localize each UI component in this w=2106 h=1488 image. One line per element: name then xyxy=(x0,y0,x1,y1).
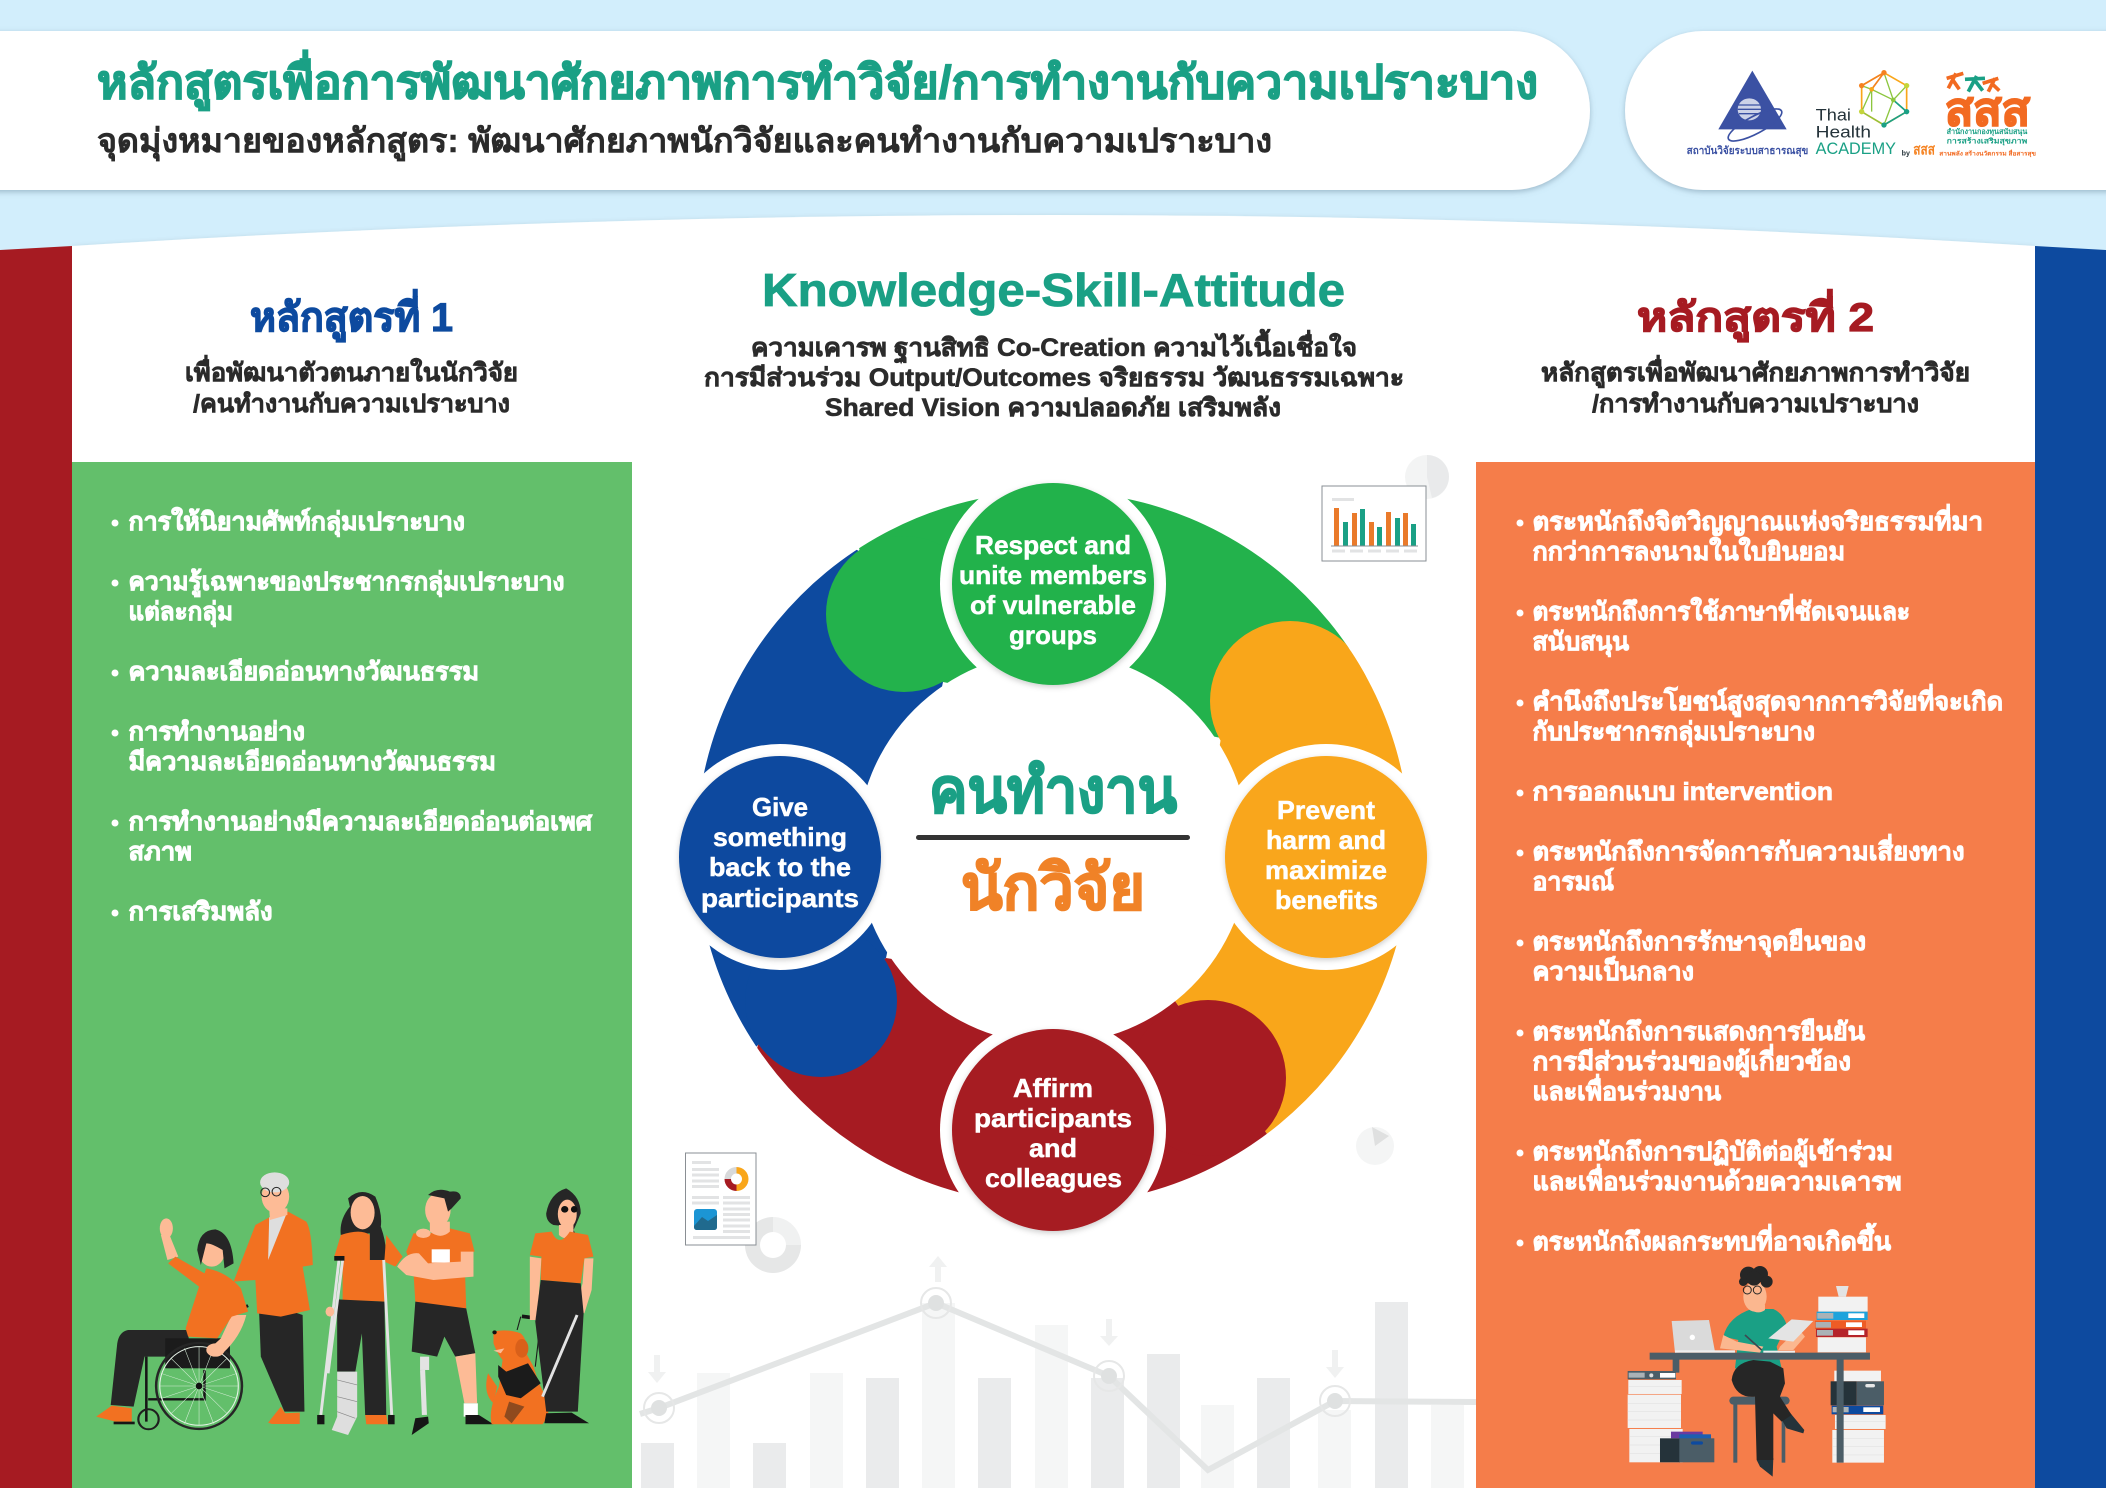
logo: ThaiHealth: สสส xyxy=(1913,143,1935,159)
course 1 heading block xyxy=(185,289,518,418)
guide dog xyxy=(486,1314,548,1424)
logo: ThaiHealth: การสร้างเสริมสุขภาพ xyxy=(1947,136,2027,145)
course 2 bullet list xyxy=(1516,504,2003,1256)
man with prosthetic leg xyxy=(397,1190,493,1435)
logos group xyxy=(1687,70,2036,159)
node: respect and unite: unite members xyxy=(959,560,1147,590)
node: affirm participants: participants xyxy=(974,1103,1132,1133)
keywords text: การมีส่วนร่วม Output/Outcomes จริยธรรม วัฒนธรรมเฉพาะ xyxy=(704,364,1404,392)
logo: ThaiHealth: by xyxy=(1902,148,1911,157)
woman with white cane xyxy=(530,1188,593,1423)
course 1 bullet list: การให้นิยามศัพท์กลุ่มเปราะบาง xyxy=(128,506,465,538)
course 1 description: /คนทำงานกับความเปราะบาง xyxy=(193,390,510,418)
node: give something back: back to the xyxy=(709,852,851,882)
course 2 bullet list: สนับสนุน xyxy=(1532,628,1629,658)
illustration: researcher at desk xyxy=(1628,1266,1886,1477)
person in wheelchair xyxy=(96,1218,248,1429)
stack on desk with cup xyxy=(1815,1286,1868,1352)
node: respect and unite xyxy=(940,471,1166,697)
course 2 bullet list: ตระหนักถึงการรักษาจุดยืนของ xyxy=(1532,928,1866,958)
heading: course 2: หลักสูตรที่ 2 xyxy=(1637,289,1874,342)
center text: workers: คนทำงาน xyxy=(929,757,1177,826)
course 1 bullet list xyxy=(112,506,593,926)
faint pie decoration top xyxy=(1405,455,1449,499)
left paper stack and box xyxy=(1628,1371,1714,1462)
heading: course 1: หลักสูตรที่ 1 xyxy=(250,289,453,342)
header panel: title xyxy=(0,31,1590,190)
center label xyxy=(916,757,1190,923)
node: affirm participants xyxy=(940,1017,1166,1243)
course 1 bullet list: ความละเอียดอ่อนทางวัฒนธรรม xyxy=(128,658,479,686)
panel: main white body xyxy=(72,215,2035,1488)
course 2 bullet list: ตระหนักถึงการแสดงการยืนยัน xyxy=(1532,1018,1865,1046)
course 2 bullet list: ตระหนักถึงการใช้ภาษาที่ชัดเจนและ xyxy=(1532,594,1910,626)
node: prevent harm: Prevent xyxy=(1277,795,1375,825)
logo: ThaiHealth xyxy=(1902,73,2036,159)
course 2 bullet list: ตระหนักถึงผลกระทบที่อาจเกิดขึ้น xyxy=(1532,1222,1891,1256)
course 2 bullet list: คำนึงถึงประโยชน์สูงสุดจากการวิจัยที่จะเกิด xyxy=(1532,684,2003,718)
researcher figure xyxy=(1720,1266,1813,1477)
course 2 bullet list: ตระหนักถึงการปฏิบัติต่อผู้เข้าร่วม xyxy=(1532,1138,1893,1168)
faint background chart xyxy=(640,1256,1476,1488)
node: prevent harm: maximize xyxy=(1265,855,1387,885)
heading: Knowledge-Skill-Attitude: Knowledge-Skill-Attitude xyxy=(762,264,1345,316)
central heading block xyxy=(704,264,1404,422)
logo: HSRI triangle xyxy=(1687,71,1808,158)
man in jacket xyxy=(234,1172,313,1424)
center divider xyxy=(916,835,1190,840)
course 2 bullet list: และเพื่อนร่วมงาน xyxy=(1532,1074,1721,1106)
header panel: logos xyxy=(1625,31,2106,190)
woman with crutches xyxy=(317,1192,403,1435)
node: affirm participants: colleagues xyxy=(985,1163,1122,1193)
panel: course 1 green xyxy=(72,462,632,1488)
logo: Thai Health Academy: Health xyxy=(1816,122,1871,141)
icon: report document xyxy=(686,1153,756,1245)
node: respect and unite: of vulnerable xyxy=(970,590,1136,620)
course 1 description xyxy=(185,355,518,418)
logo: Thai Health Academy xyxy=(1816,70,1909,158)
logo: Thai Health Academy: ACADEMY xyxy=(1816,139,1896,158)
course 2 bullet list: อารมณ์ xyxy=(1532,867,1614,896)
logo: ThaiHealth: สสส xyxy=(1945,84,2031,135)
course 1 description: เพื่อพัฒนาตัวตนภายในนักวิจัย xyxy=(185,355,518,387)
stool xyxy=(1729,1397,1790,1463)
keywords text: Shared Vision ความปลอดภัย เสริมพลัง xyxy=(825,394,1281,422)
ring segments xyxy=(704,498,1402,1192)
course 2 bullet list: กกว่าการลงนามในใบยินยอม xyxy=(1532,536,1845,566)
course 2 bullet list: ความเป็นกลาง xyxy=(1532,956,1694,986)
icon: chart card xyxy=(1322,486,1426,561)
logo: HSRI triangle: สถาบันวิจัยระบบสาธารณสุข xyxy=(1687,145,1808,158)
node: respect and unite: Respect and xyxy=(975,530,1131,560)
course 2 description: หลักสูตรเพื่อพัฒนาศักยภาพการทำวิจัย xyxy=(1541,355,1970,389)
course 2 bullet list: และเพื่อนร่วมงานด้วยความเคารพ xyxy=(1532,1164,1902,1196)
course 2 bullet list: ตระหนักถึงการจัดการกับความเสี่ยงทาง xyxy=(1532,834,1964,866)
title: หลักสูตรเพื่อการพัฒนาศักยภาพการทำวิจัย/การทำงานกับความเปราะบาง xyxy=(97,50,1538,111)
node: prevent harm xyxy=(1213,744,1439,970)
course 1 bullet list: มีความละเอียดอ่อนทางวัฒนธรรม xyxy=(128,748,496,776)
course 2 bullet list: การออกแบบ intervention xyxy=(1532,778,1833,806)
node: prevent harm: benefits xyxy=(1275,885,1378,915)
course 1 bullet list: การทำงานอย่างมีความละเอียดอ่อนต่อเพศ xyxy=(128,808,593,836)
course 2 heading block xyxy=(1541,289,1970,418)
course 1 bullet list: สภาพ xyxy=(128,838,192,866)
right paper stack and box xyxy=(1831,1371,1886,1463)
node: give something back: Give xyxy=(752,792,808,822)
course 2 description xyxy=(1541,355,1970,418)
course 1 bullet list: แต่ละกลุ่ม xyxy=(128,598,233,628)
diagram: cycle ring xyxy=(676,482,1430,1236)
node: give something back: something xyxy=(713,822,847,852)
node: prevent harm: harm and xyxy=(1266,825,1386,855)
course 2 bullet list: การมีส่วนร่วมของผู้เกี่ยวข้อง xyxy=(1532,1044,1851,1078)
right blue side bar xyxy=(2035,246,2106,1488)
desk and laptop xyxy=(1650,1320,1870,1463)
keywords text: ความเคารพ ฐานสิทธิ Co-Creation ความไว้เนื้อเชื่อใจ xyxy=(751,328,1357,364)
left red side bar xyxy=(0,246,72,1488)
course 1 bullet list: ความรู้เฉพาะของประชากรกลุ่มเปราะบาง xyxy=(128,568,564,598)
keywords text xyxy=(704,328,1404,422)
logo: Thai Health Academy: Thai xyxy=(1816,106,1851,125)
course 1 bullet list: การทำงานอย่าง xyxy=(128,718,305,746)
illustration: diverse people xyxy=(96,1172,593,1435)
center text: researchers: นักวิจัย xyxy=(961,854,1145,923)
logo: ThaiHealth: สานพลัง สร้างนวัตกรรม สื่อสารสุข xyxy=(1939,148,2036,157)
logo: ThaiHealth: สำนักงานกองทุนสนับสนุน xyxy=(1947,127,2027,136)
node: respect and unite: groups xyxy=(1009,620,1097,650)
node: affirm participants: Affirm xyxy=(1013,1073,1093,1103)
faint donut decoration xyxy=(745,1217,801,1273)
node: give something back xyxy=(667,744,893,970)
node: give something back: participants xyxy=(701,883,859,913)
node: affirm participants: and xyxy=(1029,1133,1077,1163)
course 2 bullet list: ตระหนักถึงจิตวิญญาณแห่งจริยธรรมที่มา xyxy=(1532,504,1983,536)
panel: course 2 orange xyxy=(1476,462,2035,1488)
course 2 bullet list: กับประชากรกลุ่มเปราะบาง xyxy=(1532,718,1815,748)
course 1 bullet list: การเสริมพลัง xyxy=(128,898,272,926)
course 2 description: /การทำงานกับความเปราะบาง xyxy=(1592,390,1919,418)
faint pie decoration bottom xyxy=(1356,1127,1394,1165)
subtitle: จุดมุ่งหมายของหลักสูตร: พัฒนาศักยภาพนักวิจัยและคนทำงานกับความเปราะบาง xyxy=(97,122,1272,162)
